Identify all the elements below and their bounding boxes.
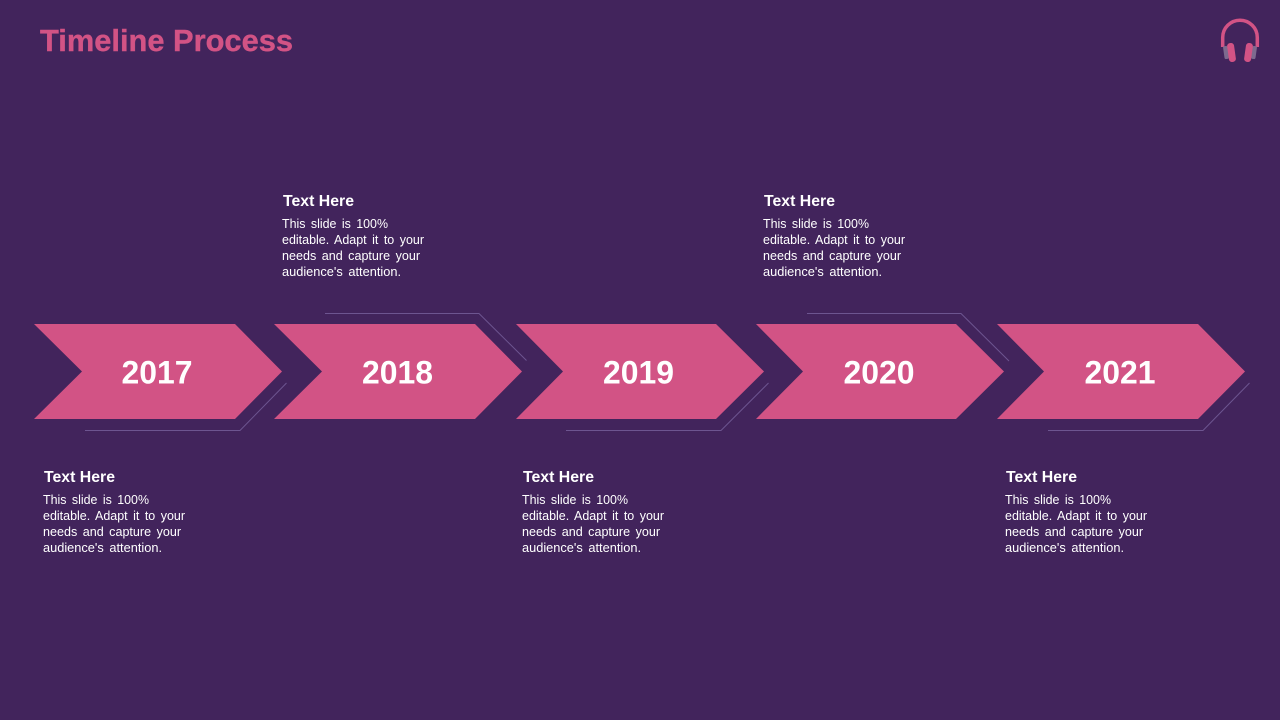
- text block: 2018: audience's attention.: [282, 265, 401, 279]
- text block: 2020: This slide is 100%: [763, 217, 869, 231]
- text block: 2018: This slide is 100%: [282, 217, 388, 231]
- timeline step: 2020: [756, 324, 1004, 419]
- text block: 2017: audience's attention.: [43, 541, 162, 555]
- timeline step: 2018: 2018: [362, 354, 433, 390]
- text block: 2020: Text Here: [764, 193, 835, 210]
- text block: 2019: [522, 469, 664, 555]
- text block: 2018: needs and capture your: [282, 249, 420, 263]
- text block: 2017: Text Here: [44, 469, 115, 486]
- text block: 2020: needs and capture your: [763, 249, 901, 263]
- text block: 2019: audience's attention.: [522, 541, 641, 555]
- text block: 2020: audience's attention.: [763, 265, 882, 279]
- timeline step: 2021: [997, 324, 1245, 419]
- timeline step: 2020: 2020: [844, 354, 914, 390]
- timeline step: 2017: [34, 324, 282, 419]
- text block: 2019: Text Here: [523, 469, 594, 486]
- text block: 2021: This slide is 100%: [1005, 493, 1111, 507]
- text block: 2018: [282, 193, 424, 279]
- text block: 2021: editable. Adapt it to your: [1005, 509, 1147, 523]
- text block: 2021: Text Here: [1006, 469, 1077, 486]
- timeline step: 2019: [516, 324, 764, 419]
- text block: 2018: Text Here: [283, 193, 354, 210]
- timeline step: 2019: 2019: [603, 354, 674, 390]
- timeline step: 2018: [274, 324, 522, 419]
- text block: 2021: audience's attention.: [1005, 541, 1124, 555]
- text block: 2019: This slide is 100%: [522, 493, 628, 507]
- text block: 2021: needs and capture your: [1005, 525, 1143, 539]
- text block: 2019: editable. Adapt it to your: [522, 509, 664, 523]
- text block: 2017: editable. Adapt it to your: [43, 509, 185, 523]
- text block: 2019: needs and capture your: [522, 525, 660, 539]
- text block: 2017: [43, 469, 185, 555]
- text block: 2017: This slide is 100%: [43, 493, 149, 507]
- title: Timeline Process: [40, 23, 293, 58]
- text block: 2021: [1005, 469, 1147, 555]
- icon: headphones: [1223, 20, 1257, 62]
- text block: 2020: [763, 193, 905, 279]
- text block: 2020: editable. Adapt it to your: [763, 233, 905, 247]
- timeline step: 2021: 2021: [1084, 354, 1156, 390]
- text block: 2017: needs and capture your: [43, 525, 181, 539]
- text block: 2018: editable. Adapt it to your: [282, 233, 424, 247]
- timeline step: 2017: 2017: [122, 354, 192, 390]
